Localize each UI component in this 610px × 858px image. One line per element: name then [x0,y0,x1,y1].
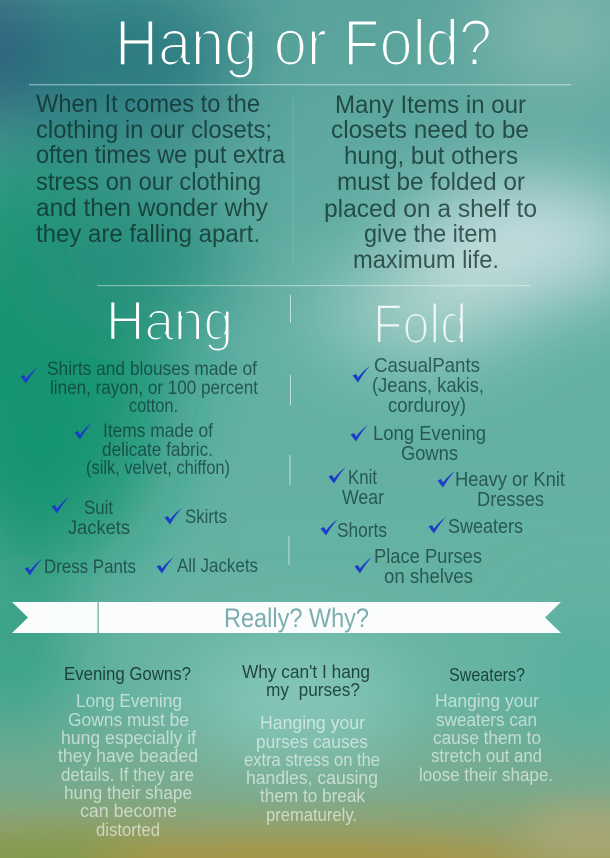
text block: intro right: Many Items in our [335,91,526,119]
panel: sweaters [419,664,553,785]
item: dress pants: Dress Pants [44,557,136,578]
heading: Fold: Fold [373,292,467,355]
text block: intro right: closets need to be [331,116,529,144]
divider: intro columns [292,95,294,265]
text block: them to break [260,786,366,806]
item: place purses: Place Purses [374,545,482,568]
heading: my purses? [266,679,360,700]
heading: Why can't I hang [242,661,370,682]
text block: intro right: placed on a shelf to [324,195,537,223]
text block: details. If they are [61,765,194,785]
text block: purses causes [256,732,368,752]
item: casual pants [372,354,484,417]
item: casual pants: corduroy) [388,394,466,417]
item: delicate fabric [86,421,230,479]
item: heavy or knit dresses [455,468,565,511]
text block: intro left: and then wonder why [36,194,268,222]
icon: check [354,557,372,574]
text block: intro left: clothing in our closets; [36,116,272,144]
text block: intro left: stress on our clothing [36,168,261,196]
panel: fold list [320,354,565,588]
item: shorts: Shorts [337,519,387,542]
icon: check [24,559,42,576]
text block: stretch out and [431,746,542,766]
icon: check [164,508,182,524]
heading: Hang: Hang [106,289,233,352]
text block: cause them to [433,728,541,748]
item: casual pants: (Jeans, kakis, [372,374,484,397]
divider: columns [288,295,291,565]
text block: intro right: maximum life. [353,246,499,274]
item: shirts and blouses: Shirts and blouses made of [47,359,258,380]
heading: Evening Gowns? [64,663,191,684]
text block: sweaters can [436,710,537,730]
icon: check [156,557,174,574]
text block: distorted [96,820,160,840]
text block: prematurely. [266,805,357,825]
item: suit jackets: Jackets [68,518,130,539]
text block: intro right: hung, but others [344,142,518,170]
text block: intro right [324,91,537,274]
item: long evening gowns: Long Evening [373,422,486,445]
item: suit jackets: Suit [84,498,114,519]
text block [419,691,553,785]
divider: under title [29,84,571,85]
item: knit wear: Knit [348,466,377,489]
panel: hang list [20,359,259,578]
item: suit jackets [68,498,130,539]
text block: hung especially if [61,728,197,748]
icon: check [52,497,69,514]
title: Hang or Fold? [115,6,492,79]
text block: intro left: they are falling apart. [36,220,260,248]
text block: intro left: When It comes to the [36,90,260,118]
text block: intro right: give the item [364,220,497,248]
item: knit wear [342,466,384,509]
text block: intro left [36,90,285,248]
icon: check [352,366,370,382]
item: shirts and blouses: cotton. [129,396,178,417]
panel: evening gowns [58,663,198,840]
item: delicate fabric: delicate fabric. [102,440,213,461]
item: casual pants: CasualPants [374,354,480,377]
divider: above columns [97,285,530,286]
item: sweaters: Sweaters [448,515,523,538]
text block: Hanging your [260,713,365,733]
item: shirts and blouses: linen, rayon, or 100 percent [50,378,259,399]
item: delicate fabric: (silk, velvet, chiffon) [86,458,230,479]
text block: they have beaded [58,746,198,766]
text block: loose their shape. [419,765,553,785]
item: heavy or knit dresses: Heavy or Knit [455,468,565,491]
item: place purses [374,545,482,588]
text block: Long Evening [76,691,182,711]
icon: check [428,517,446,534]
icon: check [74,423,92,440]
icon: check [328,467,346,484]
text block: hung their shape [64,783,192,803]
text block: handles, causing [246,768,378,788]
item: long evening gowns: Gowns [401,442,458,465]
item: knit wear: Wear [342,486,384,509]
text block: Hanging your [435,691,539,711]
text block: Gowns must be [68,710,189,730]
heading [242,661,370,700]
heading: Sweaters? [449,664,525,685]
banner: Really? Why? [12,602,561,633]
text block: extra stress on the [244,750,380,770]
text block: intro left: often times we put extra [36,141,285,169]
panel: purses [242,661,380,825]
item: long evening gowns [373,422,486,465]
text block [58,691,198,840]
item: all jackets: All Jackets [177,556,258,577]
item: place purses: on shelves [384,565,473,588]
icon: check [20,367,38,384]
text block [244,713,380,825]
icon: check [438,471,455,488]
item: skirts: Skirts [185,507,227,528]
banner: Really? Why?: Really? Why? [224,603,369,633]
icon: check [320,519,338,536]
icon: check [350,425,368,442]
text block: can become [80,801,177,821]
text block: intro right: must be folded or [337,168,525,196]
item: delicate fabric: Items made of [103,421,214,442]
item: shirts and blouses [47,359,259,417]
item: heavy or knit dresses: Dresses [477,488,544,511]
